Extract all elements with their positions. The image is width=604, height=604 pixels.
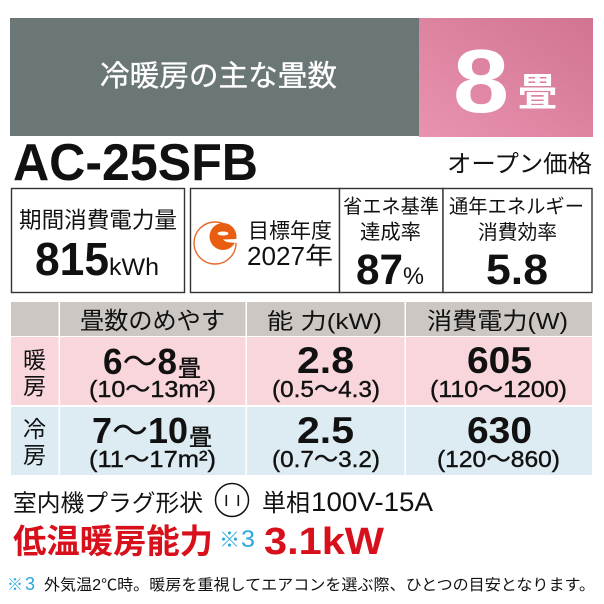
table row: cooling: 畳 bbox=[189, 424, 212, 450]
panel: annual energy efficiency: 消費効率 bbox=[478, 221, 557, 244]
panel: target year: 目標年度 bbox=[248, 220, 332, 243]
panel: annual power consumption bbox=[12, 188, 184, 292]
low temperature heating capacity: 3 bbox=[241, 526, 255, 553]
table row: heating: 畳 bbox=[178, 355, 201, 381]
banner value: 8 tatami bbox=[419, 18, 593, 137]
table row: cooling: (120〜860) bbox=[437, 446, 560, 472]
panel: energy saving achievement: 達成率 bbox=[360, 221, 421, 244]
panel: annual energy efficiency: 5.8 bbox=[486, 246, 548, 294]
model name: AC-25SFB bbox=[13, 134, 258, 192]
banner label: main room size: 冷暖房の主な畳数 bbox=[100, 60, 337, 93]
table row: heating: 605 bbox=[467, 340, 532, 381]
table row: cooling: 房 bbox=[23, 442, 46, 468]
icon: plug shape bbox=[216, 484, 248, 516]
panel: annual power consumption: 期間消費電力量 bbox=[19, 208, 177, 233]
panel: energy saving achievement: % bbox=[403, 263, 424, 290]
table row: cooling: 2.5 bbox=[297, 410, 354, 451]
open price label: オープン価格 bbox=[447, 151, 592, 178]
table row: heating: 2.8 bbox=[297, 340, 354, 381]
footnote: 3 bbox=[25, 574, 35, 594]
footnote: 外気温2℃時。暖房を重視してエアコンを選ぶ際、ひとつの目安となります。 bbox=[44, 576, 595, 594]
banner value: 8 tatami: 畳 bbox=[518, 72, 557, 115]
table row: heating: 暖 bbox=[23, 347, 46, 373]
low temperature heating capacity: 低温暖房能力 bbox=[13, 524, 213, 561]
table row: heating: (10〜13m²) bbox=[89, 376, 216, 402]
table row: heating: 6〜8 bbox=[103, 341, 177, 382]
table: capacity by mode bbox=[11, 302, 592, 475]
banner label: main room size bbox=[10, 18, 419, 136]
plug shape line: 単相 bbox=[262, 490, 310, 517]
table header bbox=[11, 302, 592, 336]
panel: annual energy efficiency bbox=[443, 188, 592, 294]
table row: cooling: 冷 bbox=[23, 416, 46, 442]
panel: target year bbox=[190, 188, 340, 292]
footnote: ※ bbox=[7, 577, 23, 594]
plug shape line bbox=[13, 484, 433, 517]
table row: cooling: 630 bbox=[467, 410, 532, 451]
table header: 能 力(kW) bbox=[267, 309, 382, 334]
table row: heating: (0.5〜4.3) bbox=[272, 376, 380, 402]
low temperature heating capacity: 3.1kW bbox=[264, 521, 384, 563]
panel: annual energy efficiency: 通年エネルギー bbox=[449, 196, 584, 218]
panel: annual power consumption: kWh bbox=[109, 254, 159, 281]
table row: cooling: 7〜10 bbox=[92, 410, 188, 451]
plug shape line: 室内機プラグ形状 bbox=[13, 490, 203, 516]
table row: cooling bbox=[11, 407, 592, 475]
panel: annual power consumption: 815 bbox=[35, 233, 109, 285]
low temperature heating capacity bbox=[13, 521, 384, 563]
panel: target year: 年 bbox=[305, 243, 333, 270]
panel: energy saving achievement: 省エネ基準 bbox=[343, 196, 439, 218]
panel: energy saving achievement bbox=[340, 188, 443, 294]
table row: heating: (110〜1200) bbox=[430, 376, 567, 402]
table header: 畳数のめやす bbox=[80, 308, 225, 335]
icon: energy saving e mark bbox=[194, 222, 238, 264]
table row: cooling: (0.7〜3.2) bbox=[272, 446, 380, 472]
panel: top banner bbox=[10, 18, 593, 137]
table header: 消費電力(W) bbox=[427, 308, 568, 334]
low temperature heating capacity: ※ bbox=[219, 529, 240, 552]
panel: energy saving achievement: 87 bbox=[356, 246, 403, 294]
table row: heating: 房 bbox=[23, 373, 46, 399]
plug shape line: 100V-15A bbox=[311, 487, 433, 517]
banner value: 8 tatami: 8 bbox=[453, 32, 509, 132]
table row: heating bbox=[11, 337, 592, 405]
table row: cooling: (11〜17m²) bbox=[89, 446, 216, 472]
panel: target year: 2027 bbox=[247, 241, 305, 271]
